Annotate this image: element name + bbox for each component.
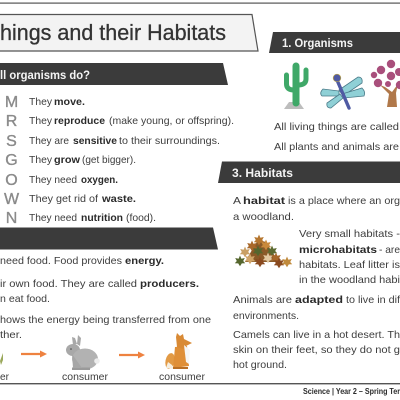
icon: fox	[164, 333, 192, 370]
panel: organisms	[269, 32, 400, 153]
text block: microhabitats: Very small habitats -	[299, 228, 400, 240]
text block: living things: All living things are called	[274, 121, 399, 133]
icon: leaf litter pile	[235, 234, 292, 268]
MRS GOWN list item: grow	[5, 152, 136, 169]
text block: habitat definition	[233, 195, 400, 223]
heading bar: food and energy	[0, 228, 218, 250]
title banner: hings and their Habitats	[0, 20, 226, 45]
text block: habitat definition: habitat	[243, 195, 286, 207]
MRS GOWN list item: move: move.	[54, 96, 85, 108]
text block: plants and animals: All plants and animals are	[274, 141, 399, 153]
text block: camels: skin on their feet, so they do not g	[233, 344, 400, 356]
arrow: rabbit to fox	[119, 352, 145, 358]
text block: habitat definition: is a place where an org	[288, 195, 400, 207]
MRS GOWN list item: grow: G	[5, 152, 18, 169]
MRS GOWN list item: sensitive: to their surroundings.	[119, 135, 220, 147]
MRS GOWN list item: move: M	[5, 94, 18, 111]
panel: habitats	[218, 162, 400, 371]
MRS GOWN list item: nutrition	[6, 210, 156, 227]
MRS GOWN list item: oxygen: oxygen.	[81, 174, 118, 186]
text block: food chain description: ther.	[0, 329, 22, 341]
text block: microhabitats	[299, 228, 400, 286]
heading: habitats: 3. Habitats	[232, 166, 293, 180]
icon: cactus	[284, 66, 306, 109]
MRS GOWN list item: nutrition: N	[6, 210, 17, 227]
MRS GOWN list item: reproduce	[6, 113, 234, 130]
MRS GOWN list item: grow: grow	[54, 154, 81, 166]
MRS GOWN list item: reproduce: They	[29, 115, 53, 127]
text block: food chain description: hows the energy being transferred from one	[0, 314, 211, 326]
text block: camels: Camels can live in a hot desert. Th	[233, 329, 400, 341]
icon: blossom tree	[371, 60, 400, 107]
label: consumer rabbit: consumer	[62, 371, 108, 383]
MRS GOWN list item: nutrition: nutrition	[81, 212, 123, 224]
MRS GOWN list item: nutrition: (food).	[126, 212, 156, 224]
text block: microhabitats: microhabitats	[299, 244, 377, 256]
MRS GOWN list item: sensitive: They are	[29, 135, 69, 147]
text block: food provides energy: energy.	[125, 255, 164, 267]
text block: producers	[0, 278, 199, 305]
MRS GOWN list item: waste	[4, 191, 136, 208]
MRS GOWN list item: sensitive	[6, 133, 220, 150]
MRS GOWN list item: move	[5, 94, 85, 111]
heading: what do all organisms do: ll organisms do?	[0, 68, 90, 82]
heading: habitats	[218, 162, 400, 183]
MRS GOWN list item: reproduce: (make young, or offspring).	[109, 115, 234, 127]
MRS GOWN list item: waste: W	[4, 191, 20, 208]
panel: what do all organisms do	[0, 63, 234, 227]
text block: adapted: environments.	[233, 310, 299, 322]
MRS GOWN list item: move: They	[29, 96, 53, 108]
heading: what do all organisms do	[0, 63, 228, 85]
text block: producers: producers.	[140, 278, 199, 290]
MRS GOWN list item: reproduce: reproduce	[54, 115, 105, 127]
title banner	[0, 14, 258, 51]
text block: adapted: Animals are	[233, 294, 292, 306]
MRS GOWN list item: waste: They get rid of	[29, 193, 98, 205]
text block: microhabitats: - are	[379, 244, 400, 256]
text block: habitat definition: A	[233, 195, 241, 207]
MRS GOWN list item: grow: (get bigger).	[82, 154, 136, 166]
MRS GOWN list item: waste: waste.	[101, 193, 136, 205]
arrow: producer to rabbit	[21, 350, 47, 358]
text block: habitat definition: a woodland.	[233, 211, 294, 223]
text block: camels	[233, 329, 400, 371]
label: producer: er	[0, 371, 9, 383]
text block: food provides energy: need food. Food provides	[0, 255, 122, 267]
MRS GOWN list item: oxygen: They need	[29, 174, 77, 186]
text block: adapted: adapted	[295, 294, 343, 306]
icon: dragonfly	[321, 74, 365, 108]
MRS GOWN list item: oxygen: O	[5, 172, 18, 189]
MRS GOWN list item: sensitive: S	[6, 133, 17, 150]
MRS GOWN list item: reproduce: R	[6, 113, 17, 130]
text block: microhabitats: habitats. Leaf litter is	[299, 259, 400, 271]
text block: adapted	[233, 294, 400, 322]
MRS GOWN list item: grow: They	[29, 154, 53, 166]
text block: producers: ir own food. They are called	[0, 278, 137, 290]
text block: adapted: to live in dif	[346, 294, 400, 306]
MRS GOWN list item: sensitive: sensitive	[73, 135, 117, 147]
icon: plant edge	[0, 353, 3, 365]
text block: microhabitats: in the woodland habi	[299, 274, 400, 286]
heading: organisms: 1. Organisms	[282, 36, 353, 50]
label: consumer fox: consumer	[159, 371, 205, 383]
panel: food and energy	[0, 228, 218, 383]
MRS GOWN list item: nutrition: They need	[29, 212, 77, 224]
text block: producers: n eat food.	[0, 293, 50, 305]
text block: camels: hot ground.	[233, 359, 287, 371]
icon: rabbit	[66, 335, 100, 370]
MRS GOWN list item: oxygen	[5, 172, 118, 189]
text block: food chain description	[0, 314, 211, 341]
